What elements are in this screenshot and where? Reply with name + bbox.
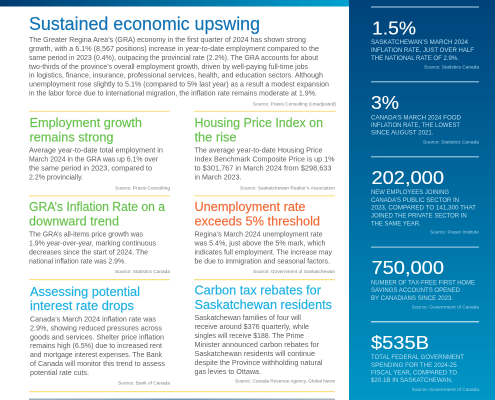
heading: downward trend: [29, 214, 119, 229]
stat: 1.5%: Source: Statistics Canada: [424, 64, 480, 69]
text block: to $301,767 in March 2024 from $298,633: [194, 165, 332, 172]
text block: Saskatchewan families of four will: [194, 315, 301, 322]
text block: 2.2% provincially.: [29, 174, 83, 181]
text block: Index Benchmark Composite Price is up 1%: [194, 156, 334, 163]
heading: [194, 199, 320, 229]
text block: of Canada will monitor this trend to assess: [30, 361, 166, 368]
stat: $535B: FISCAL YEAR, COMPARED TO: [371, 370, 457, 376]
text block: in March 2023.: [194, 174, 242, 181]
heading: Housing Price Index on: [194, 115, 323, 130]
text block: [193, 232, 332, 265]
text block: Saskatchewan residents will continue: [194, 351, 315, 358]
intro paragraph: two-thirds of the province’s overall employment growth, driven by well-paying full-time jobs: [29, 64, 308, 71]
source: Source: Statistics Canada: [115, 269, 171, 274]
stat: 202,000: Source: Fraser Institute: [430, 230, 480, 235]
text block: be due to immigration and seasonal factors.: [194, 258, 330, 265]
panel: interest rate drops: [29, 279, 171, 386]
photo strip: [29, 398, 335, 400]
stat: 750,000: 750,000: [372, 257, 444, 278]
text block: 2.9%, showing reduced pressures across: [30, 325, 163, 332]
text block: [194, 315, 323, 376]
stat: 3%: INFLATION RATE, THE LOWEST: [371, 123, 460, 129]
stat: $535B: $535B: [371, 332, 429, 353]
intro paragraph: [29, 37, 329, 97]
panel: sidebar: [349, 0, 495, 400]
text block: The GRA’s all-items price growth was: [29, 232, 143, 239]
stat: $535B: [371, 332, 480, 392]
text block: Minister announced carbon rebates for: [194, 342, 320, 349]
stat: 202,000: [371, 167, 480, 235]
text block: national inflation rate was 2.9%.: [29, 258, 126, 265]
text block: Regina’s March 2024 unemployment rate: [194, 232, 323, 239]
source: Source: Bank of Canada: [118, 381, 171, 386]
stat: 202,000: NEW EMPLOYEES JOINING: [371, 190, 449, 196]
panel: housing price index: [194, 111, 336, 190]
panel: unemployment rate: [193, 195, 336, 274]
heading: [30, 284, 140, 313]
heading: [194, 282, 332, 312]
text block: Average year-to-date total employment in: [29, 147, 163, 154]
text block: receive around $376 quarterly, while: [194, 324, 309, 331]
heading: [29, 199, 166, 229]
text block: March 2024 in the GRA was up 6.1% over: [29, 156, 159, 163]
stat: 3%: [371, 92, 480, 144]
stat: 1.5%: [371, 18, 480, 69]
stat: 1.5%: INFLATION RATE, JUST OVER HALF: [371, 48, 474, 54]
text block: despite the Province withholding natural: [194, 360, 323, 367]
panel: employment growth: [29, 111, 171, 190]
text block: potential rate cuts.: [30, 370, 89, 377]
stat: 202,000: THE SAME YEAR.: [371, 221, 421, 227]
text block: Canada’s March 2024 inflation rate was: [30, 317, 157, 324]
stat: 750,000: Source: Government of Canada: [412, 305, 480, 310]
text block: remains high (6.5%) due to increased rent: [30, 343, 162, 350]
text block: indicates full employment. The increase may: [194, 249, 332, 256]
stat: 3%: SINCE AUGUST 2021.: [371, 131, 434, 137]
source: Source: Government of Saskatchewan: [253, 269, 336, 274]
stat: 202,000: 2023, COMPARED TO 141,300 THAT: [371, 206, 476, 212]
text block: 1.9% year-over-year, marking continuous: [29, 241, 156, 248]
intro paragraph: same period in 2023 (0.4%), outpacing the provincial rate (2.2%). The GRA accounts for about: [29, 55, 318, 62]
panel: inflation rate: [29, 195, 171, 274]
text block: goods and services. Shelter price inflation: [30, 334, 164, 341]
text block: [194, 147, 334, 181]
stat: 1.5%: 1.5%: [372, 18, 416, 38]
heading: interest rate drops: [30, 298, 134, 313]
heading: remains strong: [30, 130, 114, 145]
intro paragraph: unemployment rose slightly to 5.1% (compared to 5% last year) as a result a modest expansion: [29, 81, 329, 88]
top gradient bar: [0, 0, 350, 6]
text block: and mortgage interest expenses. The Bank: [30, 352, 162, 359]
heading: Saskatchewan residents: [194, 297, 332, 312]
heading: the rise: [194, 130, 236, 145]
stat: 202,000: JOINED THE PRIVATE SECTOR IN: [371, 213, 467, 219]
stat: 1.5%: THE NATIONAL RATE OF 2.9%.: [371, 56, 459, 62]
intro paragraph: in the labor force due to international migration, the inflation rate remains moderate at 1.9%.: [29, 90, 317, 97]
stat: 750,000: BY CANADIANS SINCE 2023.: [371, 296, 453, 302]
stat: 202,000: CANADA’S PUBLIC SECTOR IN: [371, 198, 459, 204]
source: Source: Praxis Consulting: [115, 186, 171, 190]
stat: $535B: Source: Government of Canada: [412, 387, 480, 392]
stat: 1.5%: SASKATCHEWAN’S MARCH 2024: [371, 40, 469, 46]
heading: GRA’s Inflation Rate on a: [29, 199, 166, 214]
text block: [29, 232, 156, 265]
stat: $535B: SPENDING FOR THE 2024-25: [371, 363, 457, 369]
source: Source: Saskatchewan Realtor’s Association: [240, 186, 336, 190]
heading: [30, 115, 142, 145]
text block: The average year-to-date Housing Price: [194, 147, 323, 154]
heading: Employment growth: [30, 115, 142, 130]
intro paragraph: The Greater Regina Area’s (GRA) economy in the first quarter of 2024 has shown strong: [29, 37, 306, 44]
heading: Assessing potential: [30, 284, 140, 299]
stat: $535B: TOTAL FEDERAL GOVERNMENT: [371, 355, 464, 361]
text block: gas levies to Ottawa.: [194, 369, 261, 376]
intro source: Source: Praxis Consulting (Unadjusted): [253, 102, 337, 106]
stat: 750,000: NUMBER OF TAX-FREE FIRST HOME: [371, 280, 475, 286]
source: Source: Canada Revenue Agency, Global News: [235, 379, 335, 384]
stat: 202,000: 202,000: [372, 167, 444, 188]
text block: the same period in 2023, compared to: [29, 165, 152, 172]
panel: carbon tax rebates: [194, 279, 335, 384]
stat: 750,000: [371, 257, 480, 310]
stat: 3%: CANADA’S MARCH 2024 FOOD: [371, 115, 462, 121]
heading: [194, 115, 323, 145]
stat: 3%: Source: Statistics Canada: [423, 139, 480, 144]
text block: [30, 317, 166, 377]
text block: decreases since the start of 2024. The: [29, 249, 148, 256]
title: Sustained economic upswing: [29, 14, 260, 34]
heading: Carbon tax rebates for: [194, 282, 322, 298]
intro paragraph: in logistics, finance, insurance, professional services, health, and education sectors. Although: [29, 73, 323, 80]
text block: was 5.4%, just above the 5% mark, which: [193, 241, 326, 248]
heading: Unemployment rate: [194, 199, 306, 214]
stat: 3%: 3%: [371, 92, 399, 113]
text block: singles will receive $188. The Prime: [194, 333, 304, 340]
intro paragraph: growth, with a 6.1% (8,567 positions) increase in year-to-date employment compared to the: [29, 46, 319, 53]
panel: intro: [29, 14, 337, 106]
text block: [29, 147, 163, 181]
stat: 750,000: SAVINGS ACCOUNTS OPENED: [371, 288, 461, 294]
heading: exceeds 5% threshold: [194, 214, 320, 229]
stat: $535B: $20.1B IN SASKATCHEWAN.: [371, 378, 453, 384]
